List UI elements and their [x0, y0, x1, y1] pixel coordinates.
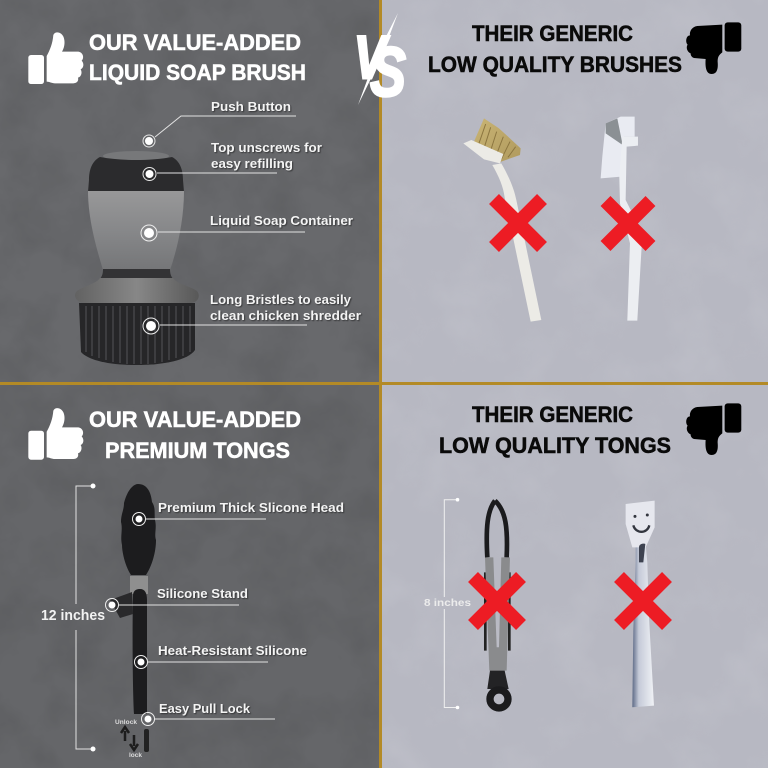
measurement: 8 inches [424, 498, 472, 709]
panel: generic brushes [382, 0, 768, 383]
callout: long bristles: clean chicken shredder [210, 309, 361, 323]
icon: thumbs up [28, 32, 83, 84]
callout: liquid soap container: Liquid Soap Container [210, 214, 353, 228]
illustration: premium tongs [110, 484, 156, 752]
heading: their generic low quality brushes: THEIR GENERIC [472, 21, 633, 46]
callout: top unscrews: Top unscrews for [211, 141, 322, 155]
heading: their generic low quality tongs: LOW QUALITY TONGS [439, 433, 671, 458]
heading: their generic low quality brushes [428, 21, 682, 77]
illustration: brush with tan bristles [463, 118, 541, 322]
lock direction arrows [115, 719, 142, 759]
heading: their generic low quality tongs: THEIR GENERIC [472, 402, 633, 427]
lock direction arrows: lock [129, 752, 142, 759]
callout: push button: Push Button [211, 100, 291, 114]
callout: easy pull lock [142, 702, 275, 726]
panel: generic tongs [382, 385, 768, 768]
heading: our value-added premium tongs: PREMIUM TONGS [105, 438, 290, 463]
icon: red cross 4 [619, 577, 667, 625]
illustration: black and steel tongs [484, 501, 511, 708]
callout: silicone head: Premium Thick Slicone Head [158, 501, 344, 515]
callout: liquid soap container [141, 214, 353, 241]
callout: top unscrews [143, 141, 322, 180]
callout: top unscrews: easy refilling [211, 157, 293, 171]
callout: silicone head [132, 501, 344, 526]
heading: our value-added liquid soap brush [89, 30, 306, 85]
VS badge [354, 13, 406, 111]
gold vertical divider [379, 0, 382, 768]
callout: push button [143, 100, 296, 147]
heading: our value-added premium tongs: OUR VALUE-ADDED [89, 407, 301, 432]
VS badge: S [370, 33, 406, 111]
illustration: smiley steel tongs [626, 501, 655, 707]
illustration: white brush with grey bristles [601, 117, 642, 321]
icon: thumbs down [686, 403, 741, 455]
measurement: 12 inches: 12 inches [41, 607, 105, 624]
icon: red cross 1 [494, 199, 542, 247]
callout: easy pull lock: Easy Pull Lock [159, 702, 250, 716]
callout: long bristles: Long Bristles to easily [210, 293, 351, 307]
icon: thumbs down [686, 22, 741, 74]
illustration: soap dispensing brush [75, 151, 199, 365]
gold horizontal divider [0, 382, 768, 385]
heading: their generic low quality brushes: LOW QUALITY BRUSHES [428, 52, 682, 77]
callout: silicone stand: Silicone Stand [157, 587, 248, 601]
heading: our value-added premium tongs [89, 407, 301, 463]
lock direction arrows: Unlock [115, 719, 137, 726]
measurement: 8 inches: 8 inches [424, 598, 472, 609]
heading: their generic low quality tongs [439, 402, 671, 458]
callout: heat-resistant silicone: Heat-Resistant Silicone [158, 644, 307, 658]
callout: heat-resistant silicone [134, 644, 307, 668]
panel: our liquid soap brush [0, 0, 380, 383]
VS badge: V [354, 24, 390, 91]
callout: long bristles [143, 293, 361, 334]
callout: silicone stand [106, 587, 248, 612]
panel: our premium tongs [0, 385, 380, 768]
icon: red cross 3 [473, 577, 521, 625]
icon: red cross 2 [606, 201, 650, 246]
heading: our value-added liquid soap brush: OUR VALUE-ADDED [89, 30, 301, 55]
heading: our value-added liquid soap brush: LIQUID SOAP BRUSH [89, 60, 306, 85]
measurement: 12 inches [41, 484, 105, 752]
icon: thumbs up [28, 408, 83, 460]
